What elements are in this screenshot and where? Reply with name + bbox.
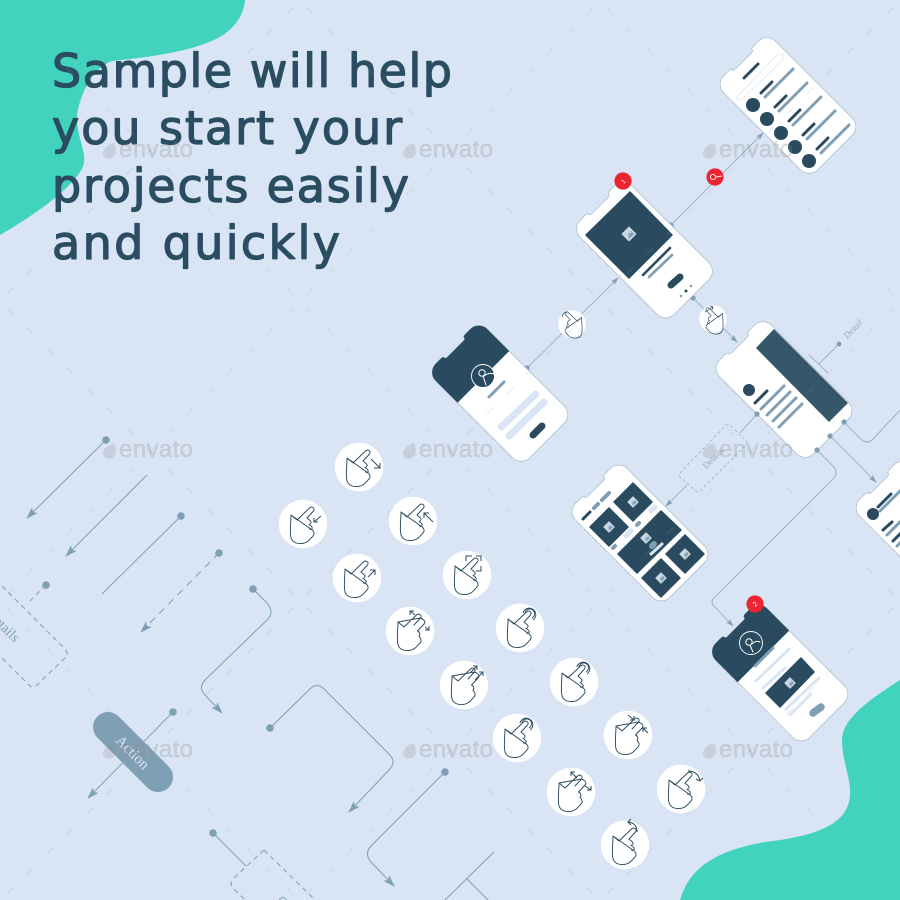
detail label connector: Detail: [841, 317, 865, 341]
arrow: profile to detail: [524, 278, 618, 371]
avatar: [740, 632, 762, 654]
gesture badge: tap on connector: [558, 310, 586, 338]
title: [52, 44, 452, 270]
gallery tiles: [590, 483, 704, 597]
phone: article screen: [711, 317, 857, 462]
gesture: two finger swipe up: [440, 661, 488, 709]
pager dots: [680, 285, 692, 297]
phone: profile screen: [427, 321, 573, 466]
title: and quickly: [52, 216, 340, 270]
gesture badge: swipe on connector: [699, 305, 727, 334]
flow connectors: left arrow samples: [0, 436, 494, 900]
pale search box: [736, 54, 783, 100]
watermark row 3: envato: [419, 736, 493, 763]
phone: profile with gallery screen: [707, 595, 853, 746]
notification badge 1: [614, 172, 632, 190]
gesture: swipe down right: [335, 443, 383, 491]
teal blob: top left: [0, 0, 245, 235]
phone: image detail screen: [572, 172, 717, 323]
gesture: swipe up left: [389, 497, 437, 545]
watermark row 1: envato: [419, 136, 493, 163]
notification badge 1: 1: [621, 178, 628, 185]
watermark row 1: envato: [719, 136, 793, 163]
badge: red key on connector: [706, 168, 724, 186]
arrow sample: elbow right: [202, 585, 271, 713]
node dots: [754, 411, 847, 453]
watermark row 1: [103, 136, 793, 163]
teal blob: bottom right: [680, 680, 900, 900]
gesture: double tap: [496, 604, 544, 652]
gesture icons set: [279, 443, 705, 869]
tile image icons: [603, 496, 691, 584]
title: Sample will help: [52, 44, 452, 98]
text bars and button: [643, 248, 680, 285]
notification badge 2: 2: [752, 601, 760, 609]
gesture: rotate counter clockwise: [601, 819, 649, 869]
arrow sample: elbow lower: [368, 768, 449, 886]
phone: grid gallery screen: [567, 460, 713, 606]
dashed details box connector: Details: [700, 445, 726, 471]
watermark row 3: envato: [119, 736, 193, 763]
gesture: swipe up right: [333, 554, 381, 602]
details box sample: [0, 581, 67, 687]
gesture: pinch in: [604, 711, 652, 759]
line sample: branch: [445, 852, 494, 900]
arrow: detail to article: [690, 295, 737, 342]
header and spacer bars: [583, 493, 662, 554]
arrow sample: straight: [66, 475, 147, 556]
phone: list screen: [715, 33, 861, 178]
flow connectors: phone screens: [524, 133, 900, 626]
envato watermarks: [103, 136, 793, 763]
avatar: [472, 364, 494, 388]
watermark row 2: envato: [419, 436, 493, 463]
gesture: tap hold: [493, 714, 541, 762]
action pill sample: [88, 708, 177, 798]
watermark row 2: envato: [719, 436, 793, 463]
detail label connector: [809, 317, 865, 373]
title: projects easily: [52, 159, 409, 213]
watermark row 3: envato: [719, 736, 793, 763]
dashed details box connector: [666, 411, 760, 506]
gesture: swipe in: [279, 500, 327, 548]
list rows: [746, 69, 849, 168]
arrow sample: dashed: [141, 549, 223, 632]
phone: partial list screen at right edge: [851, 456, 900, 602]
gesture: tap: [550, 658, 598, 706]
bottom dashed box sample: [209, 829, 313, 900]
arrow: detail to list: [668, 133, 763, 228]
gesture: rotate clockwise: [657, 765, 705, 813]
arrow sample: elbow wide: [266, 686, 393, 812]
author and text bars: [743, 384, 802, 427]
gesture: two finger apart: [386, 607, 434, 655]
banner: [756, 329, 848, 422]
arrow: article to list screen: [827, 433, 876, 482]
arrow sample: straight with node: [27, 436, 110, 518]
elbow connector off right edge: [841, 408, 900, 442]
notification badge 2: [746, 595, 764, 613]
title: you start your: [52, 101, 402, 155]
gallery image: [766, 658, 814, 707]
watermark row 1: envato: [119, 136, 193, 163]
line sample: node without arrow: [102, 512, 185, 594]
gesture: pinch out: [547, 768, 595, 816]
heading bar: [744, 64, 758, 78]
content bars: [489, 382, 544, 436]
watermark row 2: envato: [119, 436, 193, 463]
watermark row 3: [103, 736, 793, 763]
hero image: [586, 192, 672, 278]
gesture: zoom frame: [443, 551, 491, 599]
arrow: article to profile screen: [712, 447, 836, 626]
text bars: [755, 648, 821, 715]
watermark row 2: [103, 436, 793, 463]
action pill sample: Action: [112, 733, 152, 773]
